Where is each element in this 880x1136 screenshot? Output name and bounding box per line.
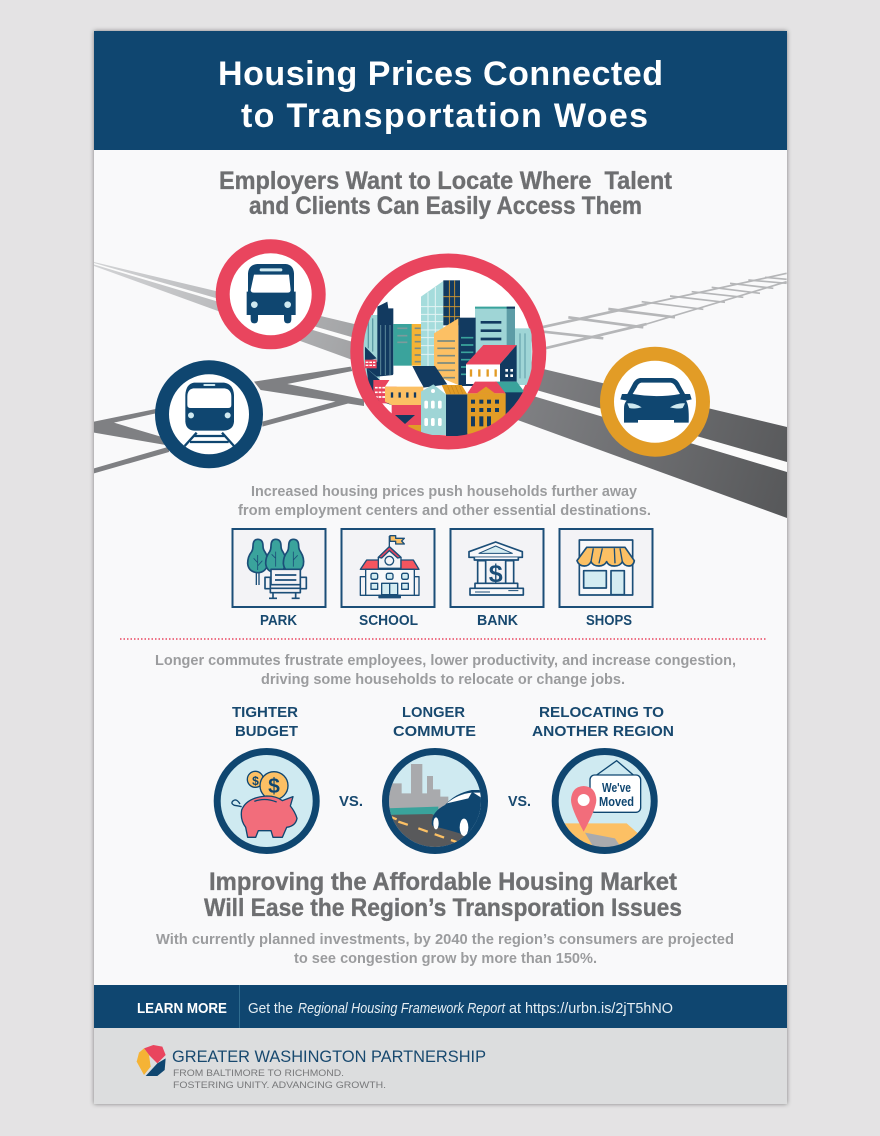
text: longer commutes xyxy=(155,652,736,688)
link text: at https://urbn.is/2jT5hNO xyxy=(509,1001,673,1017)
heading: employers: and Clients Can Easily Access Them xyxy=(249,192,642,220)
heading: relocating: ANOTHER REGION xyxy=(532,723,674,740)
heading: relocating: RELOCATING TO xyxy=(539,704,664,721)
heading: tighter budget: BUDGET xyxy=(235,723,298,740)
label: school: SCHOOL xyxy=(359,612,418,629)
road xyxy=(94,262,787,518)
sign text: We've xyxy=(602,780,631,795)
text: vs: VS. xyxy=(508,793,531,810)
dollar signs: $ xyxy=(268,775,280,798)
heading: longer commute: LONGER xyxy=(402,704,465,721)
icon: shops xyxy=(577,540,634,595)
text: longer commutes: Longer commutes frustrate employees, lower productivity, and increase congestion, xyxy=(155,652,736,669)
link text: Get the xyxy=(248,1001,293,1017)
heading: employers: Employers Want to Locate Where Talent xyxy=(219,167,673,195)
panel: partner logo xyxy=(94,1028,787,1104)
text: housing prices: from employment centers and other essential destinations. xyxy=(238,502,651,519)
railway tracks: left xyxy=(94,367,364,473)
icon: train xyxy=(162,367,256,461)
railway track: right xyxy=(542,273,787,348)
illustration: city skyline in circle xyxy=(357,260,539,442)
heading: employers xyxy=(219,167,673,220)
text: projection xyxy=(156,931,734,967)
heading: tighter budget xyxy=(232,704,298,740)
logo tagline xyxy=(173,1068,386,1091)
title: to Transportation Woes xyxy=(241,97,648,135)
heading: improving: Will Ease the Region’s Transporation Issues xyxy=(204,894,682,922)
heading: longer commute: COMMUTE xyxy=(393,723,476,740)
text: housing prices: Increased housing prices push households further away xyxy=(251,483,638,500)
dollar signs xyxy=(252,774,280,798)
icon: bank xyxy=(469,542,523,595)
text: projection: With currently planned investments, by 2040 the region’s consumers are projected xyxy=(156,931,734,948)
link text: Regional Housing Framework Report xyxy=(298,1001,506,1017)
icon: we've moved xyxy=(555,752,654,853)
icon: park xyxy=(248,539,306,598)
text: housing prices xyxy=(238,483,651,519)
logo wordmark: GREATER WASHINGTON PARTNERSHIP xyxy=(172,1047,486,1066)
title xyxy=(218,55,663,135)
heading: longer commute xyxy=(393,704,476,740)
link text xyxy=(248,1001,673,1017)
label: learn more: LEARN MORE xyxy=(137,1001,227,1017)
label: shops: SHOPS xyxy=(586,612,632,629)
icon: piggy bank xyxy=(217,752,316,850)
panel: park xyxy=(232,529,326,629)
icon: partnership logo xyxy=(137,1045,166,1076)
icon: dollar sign: $ xyxy=(489,560,503,588)
sign text: Moved xyxy=(599,794,634,809)
panel: title banner xyxy=(94,31,787,150)
heading: improving: Improving the Affordable Housing Market xyxy=(209,868,678,896)
sign text xyxy=(599,780,634,809)
icon: commute xyxy=(382,752,488,857)
panel: learn more xyxy=(94,985,787,1028)
title: Housing Prices Connected xyxy=(218,55,663,93)
text: longer commutes: driving some households to relocate or change jobs. xyxy=(261,671,625,688)
logo tagline: FROM BALTIMORE TO RICHMOND. xyxy=(173,1068,344,1079)
heading: relocating xyxy=(532,704,674,740)
panel: shops xyxy=(560,529,652,629)
text: vs: VS. xyxy=(339,793,363,810)
panel: school xyxy=(342,529,434,629)
icon: bus xyxy=(223,246,319,342)
heading: tighter budget: TIGHTER xyxy=(232,704,298,721)
dollar signs: $ xyxy=(252,774,259,788)
infographic card xyxy=(94,31,787,1104)
icon: school xyxy=(360,536,419,598)
label: bank: BANK xyxy=(477,612,518,629)
label: park: PARK xyxy=(260,612,297,629)
panel: bank xyxy=(450,529,544,629)
text: projection: to see congestion grow by more than 150%. xyxy=(294,950,597,967)
heading: improving xyxy=(204,868,682,922)
logo tagline: FOSTERING UNITY. ADVANCING GROWTH. xyxy=(173,1080,386,1091)
icon: car xyxy=(607,354,703,450)
